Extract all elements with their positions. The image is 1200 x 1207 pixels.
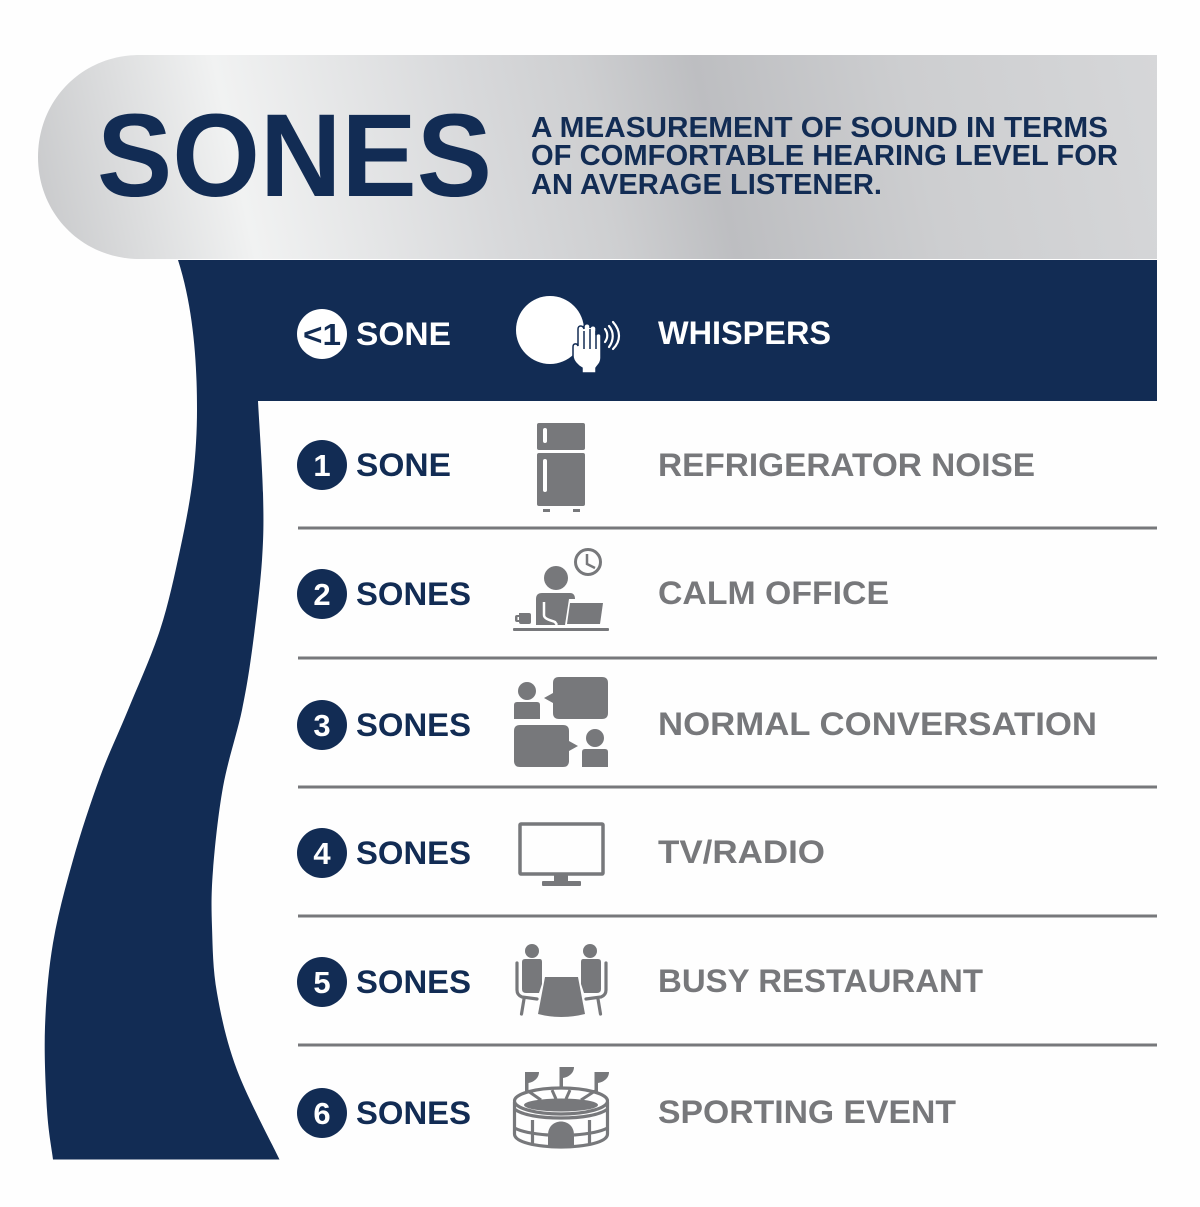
- row: 3 sones normal conversation: [297, 677, 1097, 767]
- label: REFRIGERATOR NOISE: REFRIGERATOR NOISE: [658, 447, 1035, 483]
- panel: navy curved band: [45, 260, 1157, 1160]
- label: BUSY RESTAURANT: BUSY RESTAURANT: [658, 963, 983, 999]
- row: 1 sone refrigerator: [297, 423, 1035, 512]
- label: SONE: SONE: [356, 316, 451, 352]
- label: WHISPERS: WHISPERS: [658, 315, 831, 351]
- icon: stadium: [514, 1067, 609, 1147]
- icon: whispering head with hand: [516, 296, 619, 373]
- label: SPORTING EVENT: SPORTING EVENT: [658, 1094, 956, 1130]
- icon: refrigerator: [537, 423, 585, 512]
- label: SONE: SONE: [356, 447, 451, 483]
- row: 6 sones sporting event: [297, 1067, 956, 1147]
- heading: SONES: SONES: [97, 90, 492, 222]
- badge: 3: [297, 700, 347, 750]
- row: 2 sones calm office: [297, 550, 889, 631]
- icon: restaurant table: [517, 944, 606, 1017]
- label: SONES: SONES: [356, 576, 471, 612]
- icon: two people talking: [514, 677, 608, 767]
- badge: 3: 3: [313, 708, 331, 743]
- icon: television: [520, 824, 603, 886]
- label: SONES: SONES: [356, 707, 471, 743]
- badge: <1: [297, 309, 347, 359]
- badge: 2: [297, 569, 347, 619]
- label: SONES: SONES: [356, 835, 471, 871]
- text block: definition: OF COMFORTABLE HEARING LEVEL FOR: [531, 140, 1118, 172]
- badge: 4: [297, 828, 347, 878]
- label: CALM OFFICE: CALM OFFICE: [658, 575, 889, 611]
- label: SONES: SONES: [356, 1095, 471, 1131]
- badge: 5: 5: [313, 965, 331, 1000]
- badge: 1: [297, 440, 347, 490]
- text block: definition: [531, 112, 1118, 201]
- label: TV/RADIO: TV/RADIO: [658, 834, 825, 870]
- badge: <1: <1: [303, 317, 341, 352]
- badge: 6: [297, 1088, 347, 1138]
- badge: 1: 1: [313, 448, 331, 483]
- badge: 4: 4: [313, 836, 331, 871]
- badge: 2: 2: [313, 577, 331, 612]
- row: 5 sones busy restaurant: [297, 944, 983, 1017]
- text block: definition: AN AVERAGE LISTENER.: [531, 169, 882, 201]
- badge: 6: 6: [313, 1096, 331, 1131]
- icon: office worker: [513, 550, 609, 631]
- panel: title banner: [38, 55, 1157, 259]
- label: NORMAL CONVERSATION: NORMAL CONVERSATION: [658, 706, 1097, 742]
- label: SONES: SONES: [356, 964, 471, 1000]
- text block: definition: A MEASUREMENT OF SOUND IN TERMS: [531, 112, 1108, 144]
- row: 4 sones tv radio: [297, 824, 825, 886]
- row: less than 1 sone whispers: [297, 296, 831, 373]
- badge: 5: [297, 957, 347, 1007]
